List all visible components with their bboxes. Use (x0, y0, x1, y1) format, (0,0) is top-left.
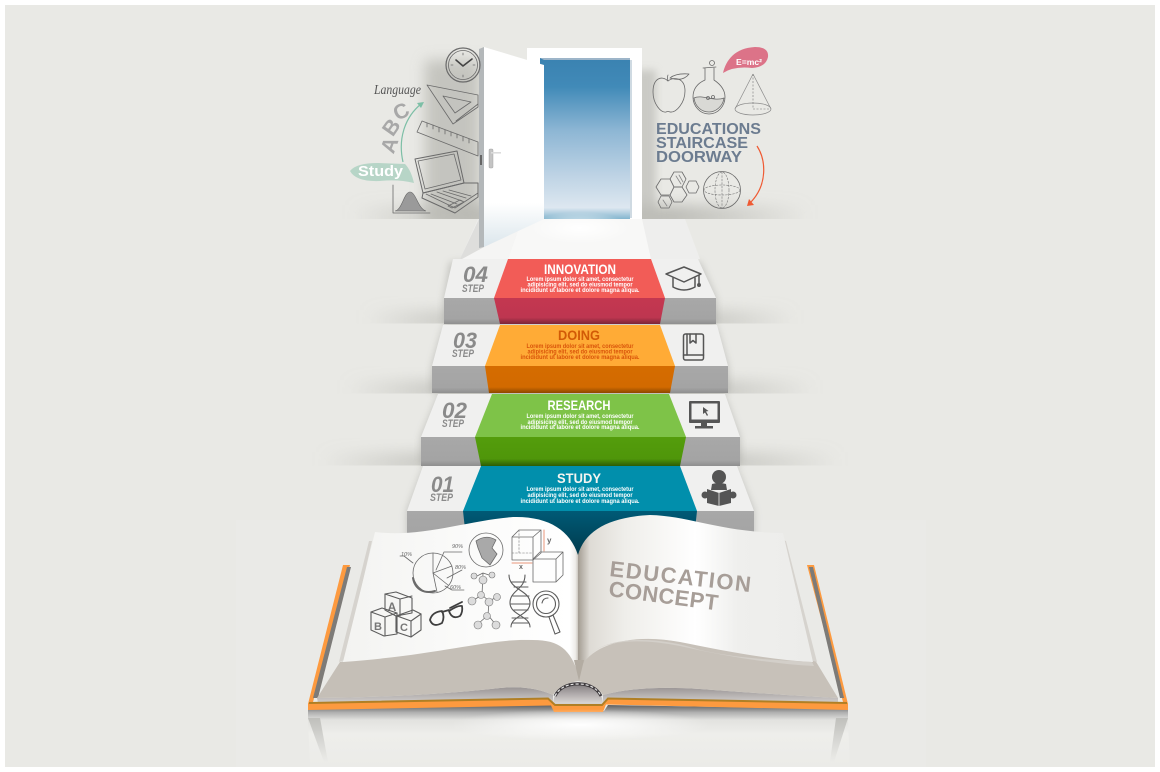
icon: book (684, 334, 704, 360)
description: Lorem ipsum dolor sit amet, consectetur (526, 413, 634, 420)
cover shadow band (308, 705, 848, 720)
icon: laptop (415, 151, 478, 213)
step 04: innovation (444, 259, 716, 324)
handwritten language label: Language (373, 83, 421, 98)
red ribbon (494, 259, 665, 298)
icon: graduation cap (666, 267, 701, 290)
teal ribbon (463, 466, 697, 511)
chart: pie sketch: 90% (452, 544, 463, 550)
abc letters (377, 98, 413, 156)
heading: RESEARCH (548, 397, 610, 413)
description: Lorem ipsum dolor sit amet, consectetur (526, 276, 634, 283)
title: EDUCATIONS (656, 121, 761, 138)
description (520, 343, 640, 361)
step 01: study (407, 466, 754, 575)
icon: monitor (689, 401, 720, 428)
step 02: research (421, 394, 740, 466)
book reflection (308, 709, 850, 767)
green arrow (401, 102, 424, 162)
description: adipisicing elit, sed do eiusmod tempor (528, 282, 633, 288)
education concept text: EDUCATION (608, 556, 752, 597)
abc letters: A (377, 134, 403, 156)
step number: 04 (463, 262, 488, 287)
icon: cone (735, 74, 771, 115)
chart: pie sketch: 80% (455, 565, 466, 571)
left back sheet (339, 541, 372, 662)
sketch doodles right of door (653, 47, 771, 208)
icon: abc blocks: A (388, 600, 397, 614)
heading: STUDY (557, 470, 602, 486)
wall and floor shadows (350, 54, 810, 533)
description: adipisicing elit, sed do eiusmod tempor (528, 492, 633, 499)
right back sheet (783, 540, 817, 662)
icon: set square (427, 85, 478, 124)
icon: hexagons (656, 172, 699, 208)
sketch doodles left of door (350, 48, 480, 213)
green ribbon (475, 394, 686, 437)
chart: bell curve (393, 185, 430, 213)
description: incididunt ut labore et dolore magna aliqua. (520, 354, 640, 361)
door leaf (479, 47, 544, 248)
cover bottom band (308, 698, 848, 712)
title (656, 121, 761, 166)
description (520, 486, 640, 505)
spine (553, 682, 603, 703)
step number: STEP (462, 283, 485, 295)
icon: ruler (417, 121, 478, 156)
step number: STEP (430, 492, 454, 504)
icon: globe (469, 533, 503, 567)
step block (407, 466, 754, 511)
icon: sphere (704, 172, 740, 208)
red arrow (747, 146, 764, 206)
title: DOORWAY (656, 149, 743, 166)
doorway (527, 48, 642, 219)
description (520, 413, 640, 431)
icon: flask (693, 60, 725, 114)
icon: cubes (512, 530, 563, 582)
description: incididunt ut labore et dolore magna aliqua. (520, 287, 640, 294)
description: adipisicing elit, sed do eiusmod tempor (528, 349, 633, 356)
description: adipisicing elit, sed do eiusmod tempor (528, 419, 633, 426)
chart: pie sketch (400, 544, 466, 593)
step block (421, 394, 740, 437)
sky opening (540, 58, 630, 219)
description: incididunt ut labore et dolore magna aliqua. (520, 424, 640, 431)
icon: glasses (430, 602, 462, 625)
icon: person reading (702, 470, 736, 506)
left page stack (317, 640, 578, 698)
door frame (527, 48, 642, 219)
description: Lorem ipsum dolor sit amet, consectetur (526, 486, 634, 493)
icon: abc blocks: C (400, 622, 408, 634)
left page (343, 517, 578, 673)
step block (432, 325, 728, 366)
description: incididunt ut labore et dolore magna aliqua. (520, 498, 640, 505)
step number: 03 (453, 328, 477, 353)
e=mc2 bubble (723, 47, 768, 73)
description (520, 276, 640, 294)
abc letters: B (378, 115, 406, 140)
step block (444, 259, 716, 298)
door handle (489, 149, 501, 168)
left cover edge (308, 565, 350, 704)
icon: abc blocks: B (374, 621, 382, 633)
step number: 02 (442, 398, 468, 423)
page curl shade (590, 640, 814, 666)
gutter wedge (574, 660, 584, 681)
right cover edge (807, 565, 848, 704)
chart: pie sketch: 60% (450, 585, 461, 591)
e=mc2 bubble: E=mc² (736, 57, 762, 67)
education concept text (607, 556, 752, 615)
icon: cubes: x (519, 564, 523, 571)
top landing (460, 212, 700, 259)
icon: magnifier (533, 591, 560, 634)
icon: apple (653, 74, 689, 112)
description: Lorem ipsum dolor sit amet, consectetur (526, 343, 634, 350)
study label (350, 163, 414, 183)
step number: STEP (442, 418, 465, 430)
chart: pie sketch: 10% (401, 552, 412, 558)
step number: STEP (452, 348, 475, 360)
icon: molecule (468, 572, 500, 629)
icon: clock (446, 48, 480, 82)
heading: INNOVATION (544, 261, 616, 277)
open book (308, 515, 848, 720)
title: STAIRCASE (656, 135, 748, 152)
right page stack (578, 638, 838, 698)
orange ribbon (485, 325, 675, 366)
under-stack grey (317, 687, 838, 704)
icon: abc blocks (371, 592, 421, 637)
inner cover shadows (313, 567, 351, 698)
study label: Study (358, 164, 403, 180)
step number: 01 (431, 472, 454, 497)
abc letters: C (390, 98, 413, 126)
heading: DOING (558, 327, 600, 343)
icon: dna (509, 575, 530, 627)
icon: cubes: y (547, 536, 552, 545)
education concept text: CONCEPT (607, 576, 720, 615)
right page (578, 515, 813, 673)
lighter panel behind book (236, 520, 926, 767)
step 03: doing (432, 325, 728, 393)
